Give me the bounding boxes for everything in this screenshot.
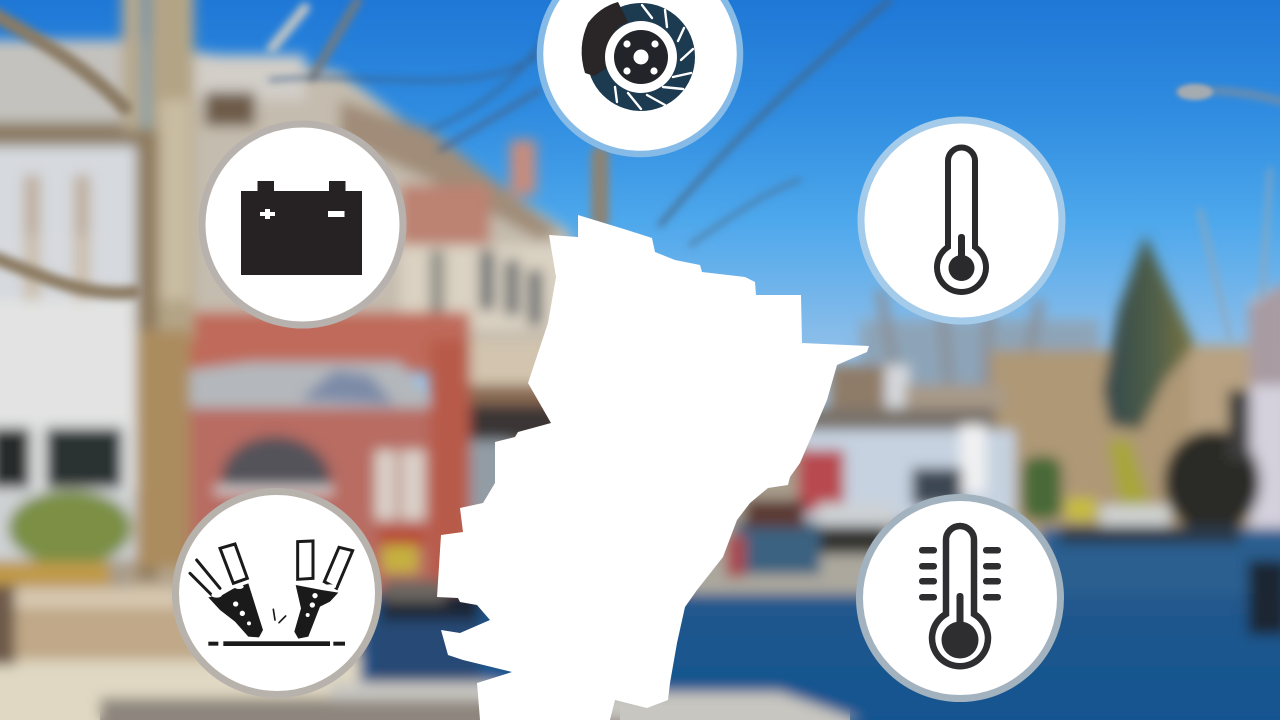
background: trees and shrubs on far side bbox=[1022, 235, 1260, 534]
icon circle: thermometer bbox=[861, 120, 1062, 321]
thermometer glyph bbox=[937, 148, 986, 292]
brake caliper bbox=[582, 2, 628, 76]
clamps glyph bbox=[190, 541, 353, 646]
white county map silhouette bbox=[437, 215, 869, 720]
background: left house roof and facade bbox=[0, 40, 145, 560]
brake rotor bbox=[587, 3, 695, 111]
background: tree trunk bbox=[122, 0, 194, 580]
background: brick house ground floor bbox=[185, 312, 570, 602]
background: bottom edge ground strip bbox=[0, 695, 1280, 720]
background: brick house upper storey bbox=[185, 50, 570, 345]
icon circle: brake disc bbox=[540, 0, 740, 154]
rotor hub bbox=[605, 21, 677, 93]
background: bare branches bbox=[0, 0, 1280, 340]
background: street lamp head bbox=[1177, 84, 1213, 100]
background: shrubs and low wall bbox=[0, 490, 230, 665]
temperature tick marks bbox=[919, 547, 1001, 600]
icon circle: jumper cable clamps bbox=[176, 492, 378, 694]
background: far-side houses bbox=[798, 285, 1280, 530]
background: bare trees on the horizon bbox=[860, 280, 1100, 420]
icon circle: thermometer with tick marks bbox=[860, 498, 1060, 698]
background: ground tone behind the buildings bbox=[0, 420, 1280, 695]
thermometer glyph bbox=[932, 526, 988, 666]
background: parked cars bbox=[726, 500, 892, 577]
icon circle: car battery bbox=[202, 124, 403, 325]
battery body bbox=[241, 181, 362, 275]
background: road and sidewalk bbox=[0, 526, 1280, 720]
